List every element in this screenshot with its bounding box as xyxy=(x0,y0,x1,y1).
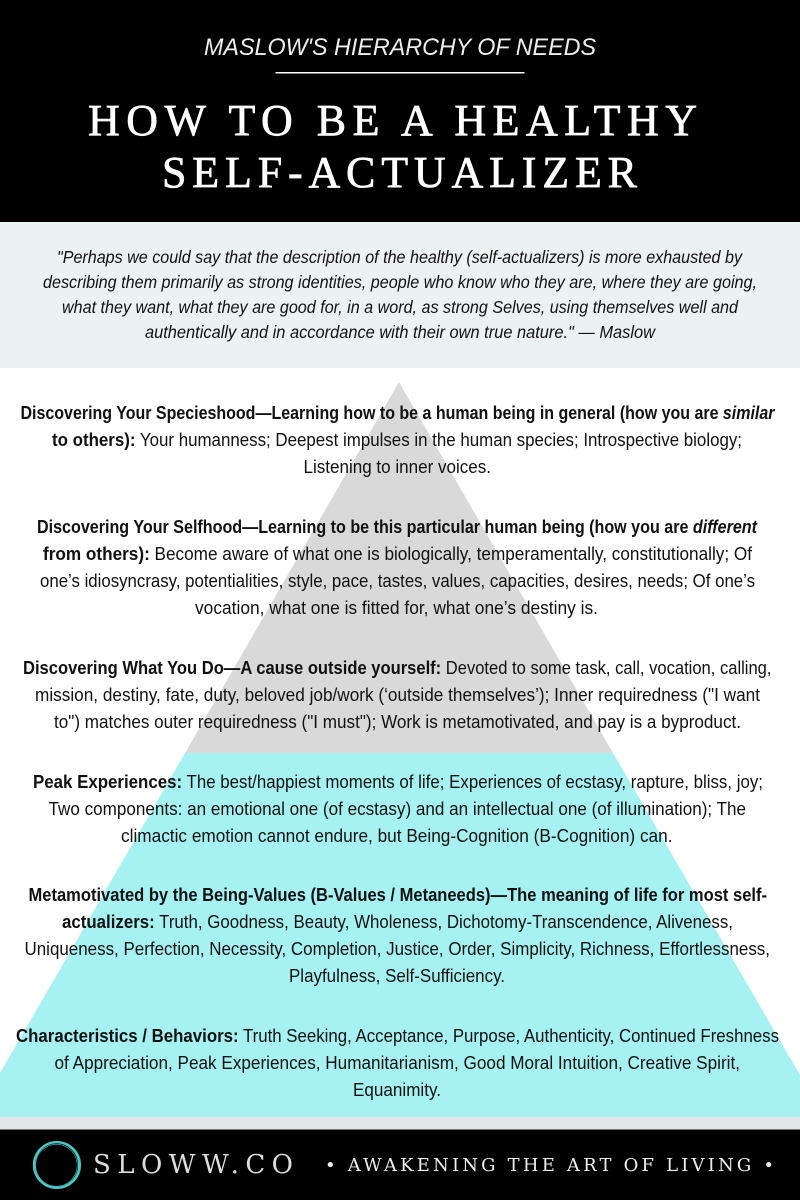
section: peak experiences: Peak Experiences: The best/happiest moments of life; Experiences of ecstasy, rapture, bliss, joy; xyxy=(33,772,763,792)
brand name: SLOWW.CO xyxy=(93,1150,293,1180)
section: characteristics: Equanimity. xyxy=(353,1080,441,1100)
section: characteristics: Characteristics / Behaviors: Truth Seeking, Acceptance, Purpose, Authenticity, Continued Freshness xyxy=(16,1026,779,1046)
pyramid upper grey tier xyxy=(185,382,613,753)
section: peak experiences xyxy=(33,772,763,846)
section: specieshood: Listening to inner voices. xyxy=(304,457,491,477)
section: metamotivated: actualizers: Truth, Goodness, Beauty, Wholeness, Dichotomy-Transcendence, Aliveness, xyxy=(62,912,733,932)
section: what you do: Discovering What You Do—A cause outside yourself: Devoted to some task, call, vocation, calling, xyxy=(23,658,772,678)
tagline: • AWAKENING THE ART OF LIVING • xyxy=(325,1155,774,1176)
pyramid lower cyan tier xyxy=(0,753,800,1117)
section: characteristics xyxy=(16,1026,779,1100)
section: selfhood: from others): Become aware of what one is biologically, temperamentally, constitutionally; Of xyxy=(43,544,753,564)
section: what you do xyxy=(23,658,772,732)
quote panel: "Perhaps we could say that the description of the healthy (self-actualizers) is more exhausted by xyxy=(57,247,743,267)
section: specieshood xyxy=(20,403,775,477)
section: selfhood: Discovering Your Selfhood—Learning to be this particular human being (how you are different xyxy=(37,517,758,537)
footer xyxy=(0,1117,800,1200)
title xyxy=(88,96,697,197)
quote panel: authentically and in accordance with their own true nature." — Maslow xyxy=(145,322,656,342)
title: SELF-ACTUALIZER xyxy=(162,148,638,197)
subtitle: MASLOW'S HIERARCHY OF NEEDS xyxy=(204,34,597,61)
section: what you do: mission, destiny, fate, duty, beloved job/work (‘outside themselves’); Inner requiredness ("I want xyxy=(35,685,760,705)
quote panel: what they want, what they are good for, in a word, as strong Selves, using themselves well and xyxy=(62,297,739,317)
section: specieshood: Discovering Your Specieshood—Learning how to be a human being in general (how you are similar xyxy=(20,403,775,423)
quote panel: describing them primarily as strong identities, people who know who they are, where they are going, xyxy=(43,272,757,292)
section: metamotivated xyxy=(24,885,770,986)
pyramid xyxy=(0,382,800,1117)
title: HOW TO BE A HEALTHY xyxy=(88,96,697,145)
header band xyxy=(0,0,800,222)
section: peak experiences: climactic emotion cannot endure, but Being-Cognition (B-Cognition) can. xyxy=(121,826,672,846)
section: peak experiences: Two components: an emotional one (of ecstasy) and an intellectual one (of illumination); The xyxy=(48,799,746,819)
section: what you do: to") matches outer requiredness ("I must"); Work is metamotivated, and pay is a byproduct. xyxy=(54,712,741,732)
section: selfhood: one’s idiosyncrasy, potentialities, style, pace, tastes, values, capacities, desires, needs; Of one’s xyxy=(40,571,755,591)
section: specieshood: to others): Your humanness; Deepest impulses in the human species; Introspective biology; xyxy=(52,430,742,450)
icon: logo ring xyxy=(33,1141,81,1189)
section: metamotivated: Playfulness, Self-Sufficiency. xyxy=(289,966,505,986)
section: selfhood: vocation, what one is fitted for, what one’s destiny is. xyxy=(195,598,598,618)
section: selfhood xyxy=(37,517,758,618)
quote panel xyxy=(0,222,800,368)
section: characteristics: of Appreciation, Peak Experiences, Humanitarianism, Good Moral Intuition, Creative Spirit, xyxy=(54,1053,740,1073)
section: metamotivated: Uniqueness, Perfection, Necessity, Completion, Justice, Order, Simplicity, Richness, Effortlessness, xyxy=(24,939,770,959)
